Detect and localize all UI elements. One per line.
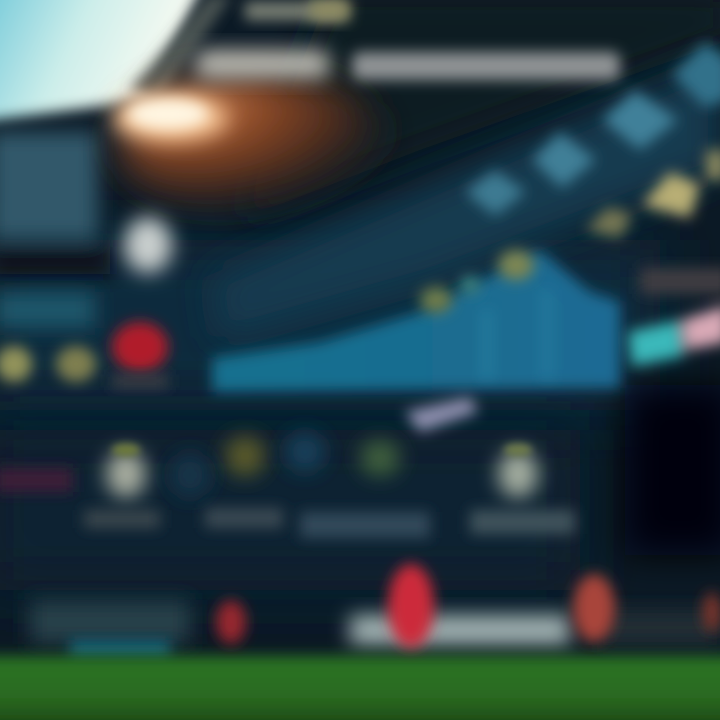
roof lights [465, 42, 720, 238]
pink streak [405, 397, 478, 432]
lower row icons [0, 432, 538, 498]
lower row captions [84, 508, 575, 538]
blue screen chart [212, 250, 620, 392]
far stand base [30, 600, 720, 658]
roof beam [130, 0, 232, 100]
pitch [0, 656, 720, 720]
blurred headline band [195, 0, 620, 80]
sky [0, 0, 205, 122]
left building [0, 132, 110, 274]
players [216, 564, 720, 648]
sun glow [112, 75, 390, 215]
left strip [0, 217, 172, 388]
coloured end of screen [628, 268, 720, 366]
